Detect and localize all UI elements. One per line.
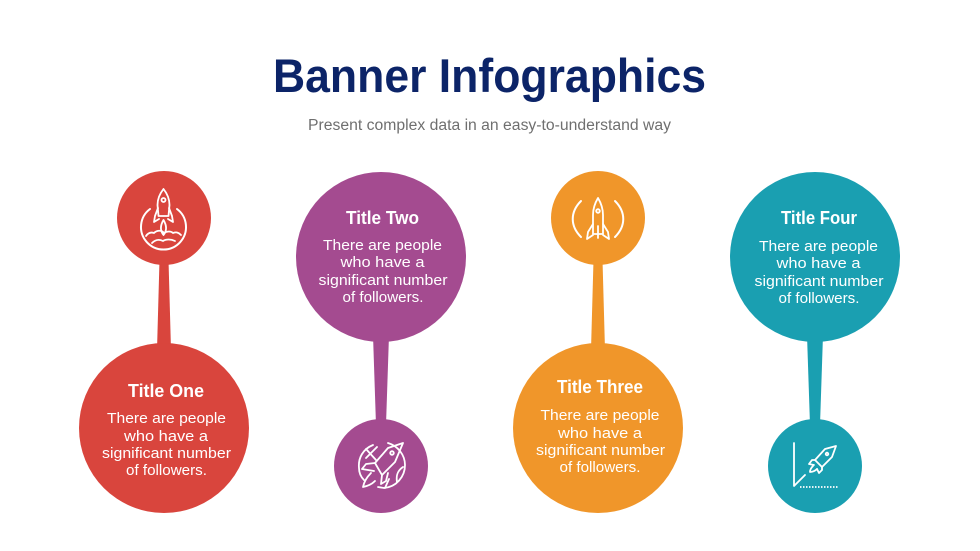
connector: purple — [373, 335, 389, 425]
text: body four — [754, 238, 884, 307]
text: body three: who have a — [557, 425, 643, 442]
text: body four: significant number — [754, 273, 884, 290]
text: title two: Title Two — [346, 208, 419, 228]
text: body two: There are people — [323, 237, 442, 254]
text: body one: of followers. — [126, 462, 207, 479]
text: body three: of followers. — [560, 459, 640, 476]
large circle: teal — [730, 172, 900, 342]
title: Banner Infographics — [273, 49, 706, 102]
text: body one: who have a — [123, 428, 209, 445]
large circle: orange — [513, 343, 683, 513]
icon: rocket on chart axes — [794, 443, 838, 487]
small circle: orange — [551, 171, 645, 265]
text: body two: who have a — [339, 254, 425, 271]
text: body one: significant number — [102, 445, 231, 462]
connector: red — [157, 260, 171, 350]
text: body three: There are people — [540, 407, 660, 424]
panel: title one (red) — [79, 171, 249, 513]
text: body three — [536, 407, 665, 476]
panel: title three (orange) — [513, 171, 683, 513]
small circle: red — [117, 171, 211, 265]
text: body two — [318, 237, 448, 306]
text: title four: Title Four — [781, 208, 857, 228]
icon: rocket between arcs — [573, 198, 623, 239]
text: body three: significant number — [536, 442, 665, 459]
text: body two: of followers. — [342, 289, 424, 306]
small circle: purple — [334, 419, 428, 513]
icon: rocket launching over clouds — [141, 189, 186, 250]
panel: title four (teal) — [730, 172, 900, 513]
subtitle: Present complex data in an easy-to-understand way — [308, 117, 671, 134]
large circle: purple — [296, 172, 466, 342]
text: body one — [102, 410, 231, 479]
large circle: red — [79, 343, 249, 513]
text: body four: who have a — [775, 255, 861, 272]
panel: title two (purple) — [296, 172, 466, 513]
text: body two: significant number — [318, 272, 448, 289]
small circle: teal — [768, 419, 862, 513]
text: title one: Title One — [128, 381, 204, 401]
text: title three: Title Three — [557, 377, 643, 397]
text: body four: There are people — [759, 238, 878, 255]
text: body four: of followers. — [778, 290, 860, 307]
text: body one: There are people — [107, 410, 226, 427]
icon: rocket over globe — [359, 443, 405, 488]
connector: teal — [807, 335, 823, 425]
connector: orange — [591, 260, 605, 350]
